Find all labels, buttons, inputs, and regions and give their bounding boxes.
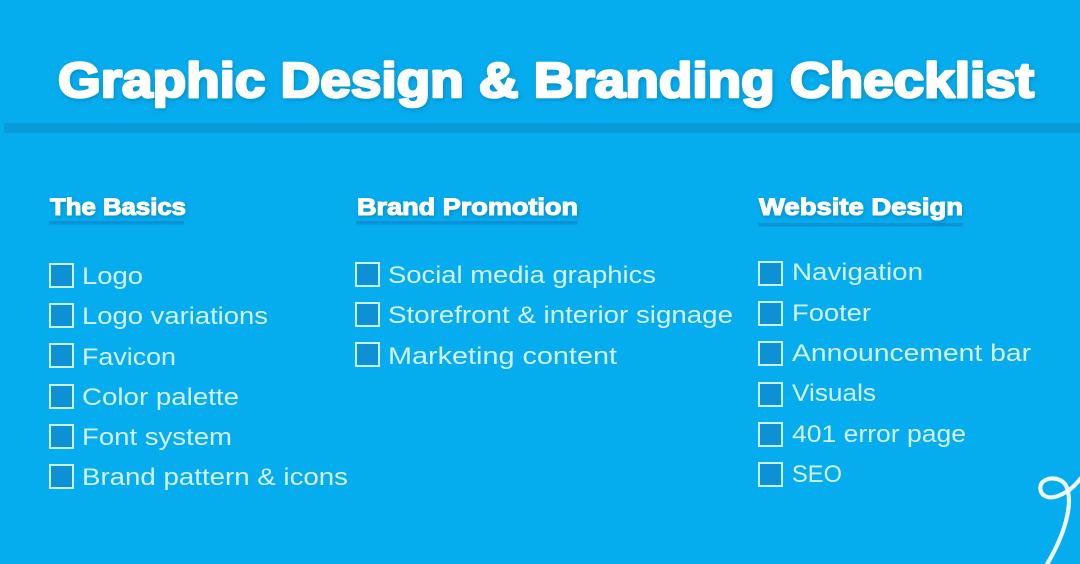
column: The Basics — [49, 194, 348, 491]
item: Visuals: Visuals — [792, 380, 876, 407]
item: Social media graphics: Social media graphics — [388, 262, 656, 289]
item: Logo: Logo — [82, 263, 143, 290]
item: Color palette: Color palette — [82, 384, 239, 411]
heading: The Basics: The Basics — [50, 194, 186, 221]
item: Announcement bar: Announcement bar — [792, 340, 1031, 367]
item: Footer — [759, 300, 871, 327]
item: Font system: Font system — [82, 424, 232, 451]
decorative white curl — [1040, 477, 1080, 564]
title divider bar — [4, 123, 1080, 133]
item: Storefront & interior signage: Storefront & interior signage — [388, 302, 733, 329]
item: Brand pattern & icons: Brand pattern & icons — [82, 464, 348, 491]
item: Navigation — [759, 259, 923, 286]
heading: Brand Promotion: Brand Promotion — [357, 194, 578, 221]
item: Favicon: Favicon — [82, 344, 176, 371]
item: SEO: SEO — [792, 461, 842, 488]
item: 401 error page: 401 error page — [792, 421, 966, 448]
column: Website Design — [758, 194, 1031, 488]
item: Navigation: Navigation — [792, 259, 923, 286]
item: Visuals — [759, 380, 876, 407]
column: Brand Promotion — [356, 194, 733, 370]
item: Logo — [50, 263, 143, 290]
item: Footer: Footer — [792, 300, 871, 327]
title: Graphic Design & Branding Checklist — [58, 54, 1034, 108]
item: SEO — [759, 461, 842, 488]
item: Logo variations: Logo variations — [82, 303, 268, 330]
item: Marketing content: Marketing content — [388, 343, 617, 370]
item: Favicon — [50, 344, 176, 371]
heading: Website Design: Website Design — [759, 194, 963, 221]
